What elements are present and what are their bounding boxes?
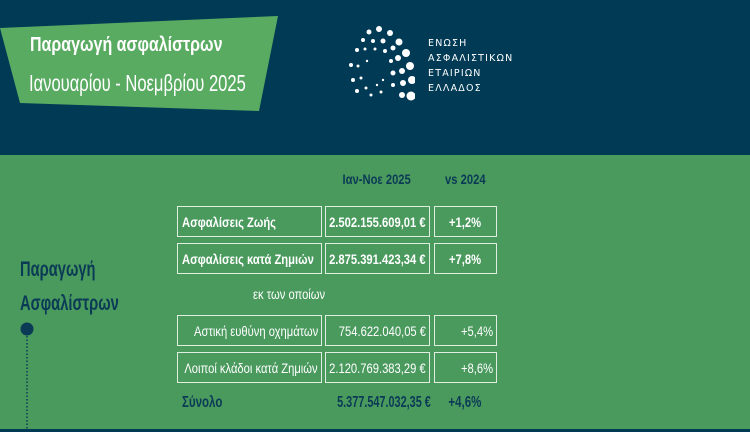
icon: dot arc (349, 26, 415, 100)
text: +8,6% (461, 360, 493, 376)
logo text: ΑΣΦΑΛΙΣΤΙΚΩΝ (428, 53, 513, 64)
logo text (428, 38, 513, 94)
text: 2.875.391.423,34 € (329, 250, 426, 266)
text: Ασφαλίσεις κατά Ζημιών (182, 250, 314, 266)
logo text: ΕΤΑΙΡΙΩΝ (428, 68, 482, 79)
left heading (20, 258, 119, 315)
panel: main green (0, 155, 750, 429)
left heading: Παραγωγή (20, 258, 96, 281)
panel: main green: vs 2024 (445, 171, 485, 187)
table rows: Ασφαλίσεις Ζωής (182, 214, 276, 230)
text: 754.622.040,05 € (339, 322, 426, 338)
text: +7,8% (449, 250, 482, 266)
table rows (177, 206, 322, 237)
subtitle: Ιανουαρίου - Νοεμβρίου 2025 (29, 70, 246, 96)
text: Λοιποί κλάδοι κατά Ζημιών (185, 360, 318, 376)
text: 2.502.155.609,01 € (329, 214, 426, 230)
text: 2.120.769.383,29 € (329, 360, 426, 376)
text: Αστική ευθύνη οχημάτων (194, 322, 318, 338)
column headers: Ιαν-Νοε 2025 (343, 171, 411, 187)
total row: Σύνολο (182, 394, 222, 411)
logo (349, 26, 513, 100)
timeline marker (20, 322, 34, 428)
note: εκ των οποίων (253, 286, 325, 302)
title: Παραγωγή ασφαλίστρων (30, 34, 222, 56)
header banner (0, 16, 278, 111)
text: +5,4% (461, 322, 493, 338)
text: 5.377.547.032,35 € (337, 394, 431, 411)
text: +4,6% (449, 394, 481, 411)
logo text: ΕΛΛΑΔΟΣ (428, 83, 482, 94)
left heading: Ασφαλίστρων (20, 292, 119, 315)
text: +1,2% (449, 214, 482, 230)
logo text: ΕΝΩΣΗ (428, 38, 468, 49)
